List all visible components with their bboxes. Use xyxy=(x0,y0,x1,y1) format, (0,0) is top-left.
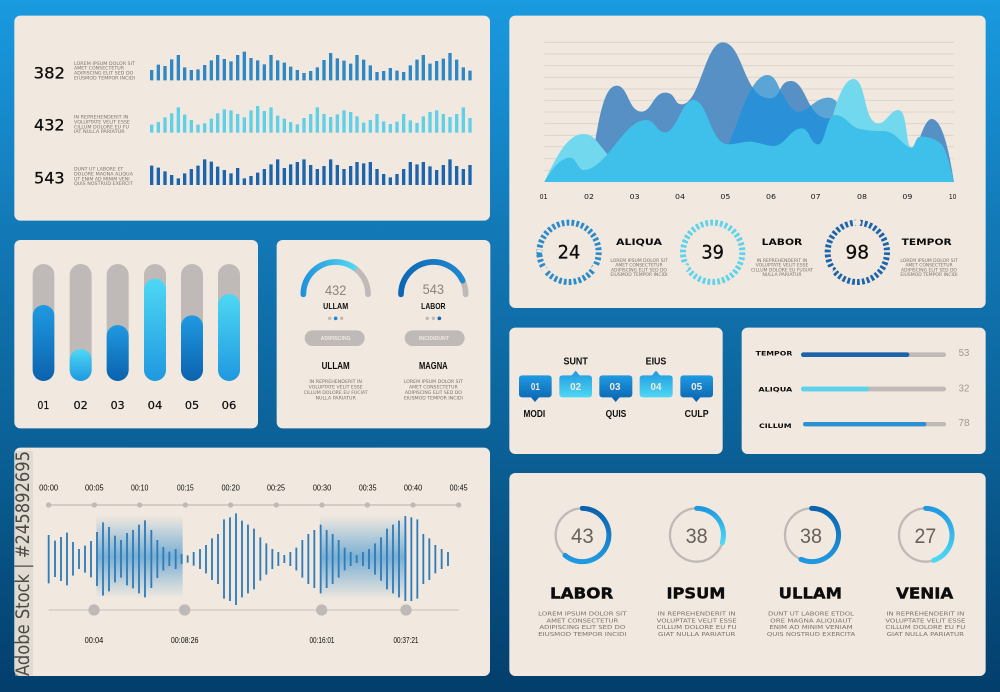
series 432: IN REPREHENDERIT IN xyxy=(74,114,128,119)
series 382 xyxy=(34,52,470,83)
ring venia 27: IN REPREHENDERIT IN xyxy=(886,611,964,617)
ring labor 43: LOREM IPSUM DOLOR SIT xyxy=(538,611,627,617)
x axis labels: 09 xyxy=(902,193,912,201)
tag 03 quis: 03 xyxy=(609,382,621,393)
gauge: ullam 432: ULLAM xyxy=(323,301,348,311)
panel: vertical bars xyxy=(14,240,258,428)
dial: labor 39 xyxy=(682,223,814,282)
upper timeline xyxy=(39,483,468,508)
gauge: labor 543 xyxy=(401,262,466,402)
ring ullam 38: ULLAM xyxy=(779,585,842,603)
x axis labels: 03 xyxy=(630,193,640,201)
lower timeline: 00:08:26 xyxy=(171,635,199,645)
bar 03 xyxy=(107,264,129,412)
dial: labor 39: 39 xyxy=(701,243,724,264)
upper timeline: 00:00 xyxy=(39,483,58,493)
series 432: VOLUPTATE VELIT ESSE xyxy=(74,119,131,124)
panel: numbered tags xyxy=(509,328,723,454)
tag 01 modi: 01 xyxy=(531,382,540,393)
ring labor 43: ADIPISCING ELIT SED DO xyxy=(539,625,625,631)
area chart xyxy=(544,42,954,182)
lower timeline xyxy=(49,604,459,645)
gauge: labor 543: ADIPISCING ELIT SED DO xyxy=(405,390,462,396)
dial: tempor 98: AMET CONSECTETUR xyxy=(905,263,953,268)
upper timeline: 00:30 xyxy=(313,483,331,493)
gauge: labor 543: AMET CONSECTETUR xyxy=(409,385,458,391)
ring ullam 38: ORE MAGNA ALIQUAUT xyxy=(770,618,853,624)
ring ipsum 38: CILLUM DOLORE EU FU xyxy=(657,625,737,631)
gauge: labor 543: INCIDIDUNT xyxy=(419,336,450,342)
ring ullam 38: DUNT UT LABORE ETDOL xyxy=(768,611,854,617)
series 543: DOLORE MAGNA ALIQUA xyxy=(74,171,133,176)
upper timeline: 00:10 xyxy=(131,483,149,493)
progress aliqua: ALIQUA xyxy=(758,386,792,393)
gauge: ullam 432: CILLUM DOLORE EU FUCIAT xyxy=(304,390,368,396)
series 543 xyxy=(34,159,470,187)
lower timeline: 00:04 xyxy=(85,635,104,645)
gauge: ullam 432: ULLAM xyxy=(322,361,350,372)
ring venia 27 xyxy=(885,508,966,638)
gauge: ullam 432: VOLUPTATE VELIT ESSE xyxy=(309,385,363,391)
bar 05 xyxy=(181,264,203,412)
dial: tempor 98 xyxy=(827,219,958,282)
ring venia 27: 27 xyxy=(914,523,936,548)
progress cillum: 78 xyxy=(958,418,970,429)
dial: aliqua 24 xyxy=(539,223,668,282)
tag 01 modi: MODI xyxy=(523,409,545,420)
series 382: LOREM IPSUM DOLOR SIT xyxy=(74,61,136,66)
lower timeline: 00:16:01 xyxy=(309,635,335,645)
bar 02: 02 xyxy=(73,399,88,412)
dial: labor 39: NULLA PARIATUR xyxy=(762,272,802,277)
bar 04: 04 xyxy=(148,399,162,412)
ring ullam 38: QUIS NOSTRUD EXERCITA xyxy=(767,632,856,638)
ring ullam 38 xyxy=(767,508,856,638)
tag 05 culp xyxy=(680,375,713,420)
series 543: DUNT UT LABORE ET xyxy=(74,166,124,171)
gauge: labor 543: MAGNA xyxy=(419,361,448,372)
dial: tempor 98: ADIPISCING ELIT SED DO xyxy=(901,267,957,272)
series 382: EIUSMOD TEMPOR INCIDI xyxy=(74,76,135,81)
tag 02 sunt: 02 xyxy=(570,382,582,393)
gauge: ullam 432 xyxy=(303,262,368,402)
ring labor 43 xyxy=(538,508,627,638)
panel: ring charts xyxy=(509,473,986,676)
ring ipsum 38: IPSUM xyxy=(666,585,725,603)
gauge: labor 543: 543 xyxy=(423,282,444,297)
dial: aliqua 24: 24 xyxy=(558,243,580,264)
dial: labor 39: CILLUM DOLORE EU FUGIAT xyxy=(751,267,814,272)
ring venia 27: GIAT NULLA PARIATUR xyxy=(887,632,964,638)
dial: aliqua 24: EIUSMOD TEMPOR INCIDI xyxy=(610,272,668,277)
upper timeline: 00:35 xyxy=(359,483,377,493)
ring labor 43: LABOR xyxy=(550,585,614,603)
bar 01: 01 xyxy=(37,399,49,412)
upper timeline: 00:40 xyxy=(404,483,422,493)
gauge: ullam 432: 432 xyxy=(325,283,346,298)
tag 03 quis xyxy=(599,375,632,420)
upper timeline: 00:15 xyxy=(177,483,194,493)
dial: aliqua 24: AMET CONSECTETUR xyxy=(615,263,663,268)
ring labor 43: AMET CONSECTETUR xyxy=(546,618,619,624)
series 543: UT ENIM AD MINIM VENI xyxy=(74,176,130,181)
dial: tempor 98: TEMPOR xyxy=(902,238,952,248)
tag 04 eius xyxy=(640,356,673,397)
bar 01 xyxy=(33,264,54,412)
x axis labels xyxy=(540,193,956,201)
series 543: QUIS NOSTRUD EXERCIT xyxy=(74,181,133,186)
series 432: 432 xyxy=(34,116,65,135)
ring venia 27: VOLUPTATE VELIT ESSE xyxy=(885,618,966,624)
bar 05: 05 xyxy=(185,399,199,412)
dial: labor 39: IN REPREHENDERIT IN xyxy=(757,258,807,263)
x axis labels: 02 xyxy=(584,193,594,201)
waveform xyxy=(49,513,448,605)
progress tempor xyxy=(756,348,969,359)
tag 01 modi xyxy=(519,375,552,420)
panel: gauges xyxy=(277,240,490,428)
bar 04 xyxy=(144,264,166,412)
tag 02 sunt xyxy=(559,356,592,397)
lower timeline: 00:37:21 xyxy=(393,635,419,645)
dial: labor 39: LABOR xyxy=(762,238,802,248)
ring labor 43: EIUSMOD TEMPOR INCIDI xyxy=(538,632,627,638)
x axis labels: 01 xyxy=(540,193,548,201)
ring labor 43: 43 xyxy=(571,523,594,548)
gauge: ullam 432: NULLA PARIATUR xyxy=(315,396,356,402)
tag 04 eius: EIUS xyxy=(646,356,666,367)
gauge: labor 543: EIUSMOD TEMPOR INCIDI xyxy=(404,396,463,402)
tag 02 sunt: SUNT xyxy=(563,356,588,367)
ring ipsum 38: IN REPREHENDERIT IN xyxy=(658,611,736,617)
ring ipsum 38: GIAT NULLA PARIATUR xyxy=(658,632,736,638)
ring ipsum 38: VOLUPTATE VELIT ESSE xyxy=(657,618,737,624)
dial: tempor 98: LOREM IPSUM DOLOR SIT xyxy=(900,258,958,263)
dial: tempor 98: 98 xyxy=(845,243,869,264)
vertical side caption: Adobe Stock | #245892695 xyxy=(13,451,34,676)
progress tempor: TEMPOR xyxy=(756,351,792,358)
dial: aliqua 24: LOREM IPSUM DOLOR SIT xyxy=(610,258,668,263)
bar 03: 03 xyxy=(111,399,125,412)
ring ullam 38: ENIM AD MINIM VENIAM xyxy=(769,625,853,631)
gauge: labor 543: LOREM IPSUM DOLOR SIT xyxy=(404,379,463,385)
progress cillum: CILLUM xyxy=(759,423,792,430)
tag 04 eius: 04 xyxy=(650,382,662,393)
dial: aliqua 24: ALIQUA xyxy=(616,238,662,248)
progress aliqua: 32 xyxy=(959,384,969,395)
panel: waveform timeline xyxy=(14,448,490,676)
upper timeline: 00:20 xyxy=(221,483,240,493)
gauge: ullam 432: ADIPISCING xyxy=(321,336,351,342)
series 543: 543 xyxy=(34,168,65,187)
dial: aliqua 24: ADIPISCING ELIT SED DO xyxy=(611,267,667,272)
ring venia 27: VENIA xyxy=(896,585,953,603)
panel: bar series xyxy=(14,16,490,221)
gauge: ullam 432: IN REPREHENDERIT IN xyxy=(309,379,362,385)
series 432: CILLUM DOLORE EU FU xyxy=(74,124,129,129)
bar 02 xyxy=(70,264,92,412)
x axis labels: 08 xyxy=(857,193,867,201)
tag 05 culp: 05 xyxy=(691,382,703,393)
series 432: IAT NULLA PARIATUR xyxy=(74,129,125,134)
ring ullam 38: 38 xyxy=(800,523,822,548)
x axis labels: 05 xyxy=(720,193,730,201)
x axis labels: 10 xyxy=(949,193,956,201)
ring venia 27: CILLUM DOLORE EU FU xyxy=(885,625,965,631)
x axis labels: 07 xyxy=(811,193,821,201)
ring ipsum 38: 38 xyxy=(686,523,708,548)
x axis labels: 06 xyxy=(766,193,776,201)
upper timeline: 00:45 xyxy=(450,483,468,493)
progress tempor: 53 xyxy=(959,348,969,359)
series 432 xyxy=(34,106,470,135)
panel: horizontal progress xyxy=(742,328,986,454)
tag 03 quis: QUIS xyxy=(606,409,626,420)
series 382: ADIPISCING ELIT SED DO xyxy=(74,71,133,76)
progress aliqua xyxy=(758,384,969,395)
dial: labor 39: VOLUPTATE VELIT ESSE xyxy=(756,263,809,268)
upper timeline: 00:05 xyxy=(85,483,104,493)
gauge: labor 543: LABOR xyxy=(421,301,445,311)
series 382: AMET CONSECTETUR xyxy=(74,66,124,71)
upper timeline: 00:25 xyxy=(267,483,285,493)
panel: area chart and dials xyxy=(509,16,986,308)
ring ipsum 38 xyxy=(657,508,737,638)
bar 06 xyxy=(218,264,240,412)
tag 05 culp: CULP xyxy=(685,409,709,420)
x axis labels: 04 xyxy=(675,193,686,201)
progress cillum xyxy=(759,418,970,430)
dial: tempor 98: EIUSMOD TEMPOR INCIDI xyxy=(900,272,958,277)
series 382: 382 xyxy=(34,64,65,83)
bar 06: 06 xyxy=(222,399,236,412)
